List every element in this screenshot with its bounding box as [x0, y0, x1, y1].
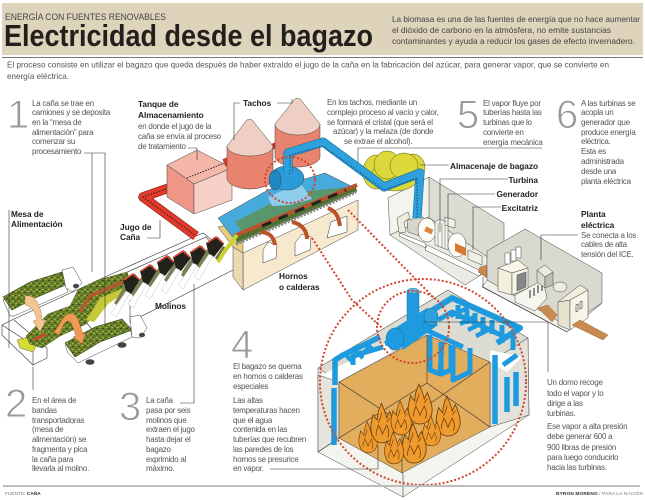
- step 2: fragmenta y pica: [32, 445, 88, 454]
- label: mesa de alimentacion: Alimentación: [11, 219, 62, 229]
- silo right: [275, 99, 320, 167]
- text: dome: debe generar 600 a: [547, 432, 613, 441]
- step 5: convierte en: [483, 128, 524, 137]
- label: planta electrica: tensión del ICE.: [581, 250, 634, 259]
- orange chamber: [339, 335, 490, 473]
- header band: [2, 3, 643, 55]
- step 2: bandas: [32, 406, 57, 415]
- furnace openings: [263, 216, 347, 263]
- step 6: A las turbinas se: [581, 99, 636, 108]
- bagasse storage: [363, 151, 425, 191]
- label: planta electrica: Planta: [581, 209, 606, 219]
- step 4: Las altas: [233, 396, 263, 405]
- step 3: 3: [119, 385, 141, 429]
- text: dome: [547, 378, 627, 472]
- step 2: alimentación) se: [32, 435, 87, 444]
- text: dome: dirige a las: [547, 399, 583, 408]
- label: tanque de almacenamiento: en donde el jugo de la: [138, 122, 212, 131]
- dome and pipe: [269, 166, 304, 190]
- step 1: 1: [7, 93, 29, 137]
- step 1: camiones y se deposita: [32, 108, 111, 117]
- header note: contaminantes y ayuda a reducir los gases de efecto invernadero.: [392, 36, 635, 46]
- header note: La biomasa es una de las fuentes de energía que no hace aumentar: [392, 14, 640, 24]
- step 3: pasa por seis: [146, 406, 191, 415]
- text: dome: hacia las turbinas.: [547, 463, 607, 472]
- machine labels: Almacenaje de bagazo: [450, 161, 538, 171]
- label: planta electrica: Se conecta a los: [581, 231, 636, 240]
- step 4: que el agua: [233, 416, 273, 425]
- title: Electricidad desde el bagazo: [4, 18, 373, 53]
- brick strips: [538, 305, 557, 322]
- intro text: energía eléctrica.: [7, 71, 69, 81]
- machine labels: [450, 161, 539, 213]
- text: dome: 900 libras de presión: [547, 443, 616, 452]
- brick strip: [478, 265, 498, 283]
- step 5: turbinas que lo: [483, 118, 533, 127]
- footer credit: BYRON MORENO / PARA LA NACIÓN: [556, 490, 644, 497]
- text: dome: para luego conducirlo: [547, 453, 619, 462]
- green plate: [235, 187, 354, 236]
- flames: [359, 384, 460, 464]
- step 2: 2: [5, 382, 27, 426]
- label: hornos: [279, 271, 320, 292]
- step 1: en la “mesa de: [32, 118, 82, 127]
- step 3: [119, 385, 196, 473]
- label: mesa de alimentacion: Mesa de: [11, 209, 44, 219]
- furnace building: [218, 200, 358, 290]
- header note: el dióxido de carbono en la atmósfera, no emite sustancias: [392, 25, 611, 35]
- step 6: Esta es: [581, 147, 606, 156]
- step 6: desde una: [581, 167, 617, 176]
- step 4: contenida en las: [233, 425, 288, 434]
- step 4: especiales: [233, 382, 269, 391]
- machine labels: Generador: [496, 189, 539, 199]
- header note: [392, 14, 640, 46]
- label: tanque de almacenamiento: Almacenamiento: [138, 110, 204, 120]
- step 6: 6: [556, 93, 578, 137]
- step 2: [5, 382, 89, 473]
- text: tachos process: complejo proceso al vacío y calor,: [327, 108, 439, 117]
- text: tachos process: En los tachos, mediante un: [327, 98, 417, 107]
- blue top plate: [218, 173, 353, 240]
- step 6: eléctrica.: [581, 137, 611, 146]
- step 6: generador que: [581, 118, 631, 127]
- step 6: acopla un: [581, 108, 613, 117]
- step 2: En el área de: [32, 396, 77, 405]
- text: dome: todo el vapor y lo: [547, 389, 604, 398]
- step 5: El vapor fluye por: [483, 99, 541, 108]
- step 4: El bagazo se quema: [233, 362, 302, 371]
- machine labels: Turbina: [509, 175, 538, 185]
- step 4: temperaturas hacen: [233, 406, 300, 415]
- white wall bands: [322, 343, 522, 382]
- label: mesa de alimentacion: [11, 209, 62, 229]
- intro text: [7, 60, 609, 81]
- step 1: procesamiento: [32, 147, 82, 156]
- label: tanque de almacenamiento: Tanque de: [138, 99, 179, 109]
- label: jugo de cana: [120, 222, 152, 242]
- step 3: molinos que: [146, 416, 187, 425]
- step 6: [556, 93, 636, 186]
- mills: [111, 237, 226, 317]
- truck right: [65, 315, 147, 365]
- step 1: alimentación” para: [32, 128, 94, 137]
- bagasse conveyor: [218, 185, 357, 262]
- red detail links: [265, 157, 436, 340]
- step 1: comenzar su: [32, 137, 75, 146]
- label: jugo de cana: Caña: [120, 232, 141, 242]
- step 6: administrada: [581, 157, 625, 166]
- yellow belt: [17, 333, 43, 352]
- control table: [515, 265, 567, 311]
- text: dome: Un domo recoge: [547, 378, 603, 387]
- step 1: [7, 93, 111, 156]
- orange arrows: [25, 296, 86, 344]
- text: tachos process: se formará el cristal (que será el: [327, 118, 433, 127]
- text: dome: Ese vapor a alta presión: [547, 422, 627, 431]
- chutes: [260, 208, 340, 245]
- step 4: en hornos o calderas: [233, 372, 303, 381]
- step 5: tuberías hasta las: [483, 108, 542, 117]
- label: molinos: Molinos: [155, 301, 186, 311]
- switchgear: [498, 247, 528, 295]
- silo left: [227, 120, 273, 189]
- label: planta electrica: eléctrica: [581, 220, 615, 230]
- juice pipe: [143, 183, 196, 236]
- text: tachos process: se extrae el alcohol).: [344, 137, 412, 146]
- turbine machine: [397, 212, 483, 276]
- step 6: produce energía: [581, 128, 636, 137]
- label: tanque de almacenamiento: [138, 99, 222, 151]
- label: tachos: Tachos: [243, 98, 272, 108]
- step 3: extraen el jugo: [146, 425, 196, 434]
- step 1: La caña se trae en: [32, 99, 94, 108]
- label: tanque de almacenamiento: caña se envía al proceso: [138, 132, 222, 141]
- step 4: tuberías que recubren: [233, 435, 306, 444]
- step 6: planta eléctrica: [581, 177, 632, 186]
- step 2: la caña para: [32, 455, 74, 464]
- turbine room: [388, 177, 504, 285]
- step 4: 4: [231, 323, 253, 367]
- step 3: bagazo: [146, 445, 172, 454]
- storage tank: [167, 150, 232, 214]
- machine labels: Excitatriz: [502, 203, 538, 213]
- label: tanque de almacenamiento: de tratamiento: [138, 142, 186, 151]
- step 3: máximo.: [146, 464, 175, 473]
- dome light panel: [268, 183, 312, 206]
- intro text: El proceso consiste en utilizar el bagazo que queda después de haber extraído el jugo de la caña en la fabricación del azúcar, para generar vapor, que se convierte en: [7, 60, 609, 70]
- step 2: (mesa de: [32, 425, 64, 434]
- cane on belt: [26, 272, 132, 348]
- step 5: energía mecánica: [483, 138, 543, 147]
- boiler: [318, 279, 529, 497]
- steam pipe: [288, 142, 420, 218]
- step 5: [457, 93, 543, 147]
- red link to silos: [224, 136, 290, 163]
- feed table and conveyor: [2, 233, 233, 365]
- cane stripes: [34, 280, 127, 340]
- label: hornos: o calderas: [279, 282, 320, 292]
- text: tachos process: azúcar) y la melaza (de donde: [333, 127, 434, 136]
- step 3: hasta dejar el: [146, 435, 191, 444]
- label: planta electrica: [581, 209, 636, 259]
- step 2: transportadoras: [32, 416, 85, 425]
- footer rule: [3, 485, 640, 487]
- label: planta electrica: cables de alta: [581, 240, 628, 249]
- text: tachos process: [327, 98, 439, 146]
- red detail circles: [320, 279, 526, 485]
- step 4: en vapor.: [233, 464, 264, 473]
- electric cabinet: [558, 285, 588, 330]
- step 3: La caña: [146, 396, 174, 405]
- label: jugo de cana: Jugo de: [120, 222, 152, 232]
- step 4: hornos se presurice: [233, 455, 299, 464]
- step 3: exprimido al: [146, 455, 187, 464]
- step 2: llevarla al molino.: [32, 464, 89, 473]
- step 4: [231, 323, 306, 473]
- electric plant room: [482, 229, 608, 340]
- truck left: [3, 267, 82, 316]
- label: hornos: Hornos: [279, 271, 308, 281]
- footer source: FUENTE: CAÑA: [5, 490, 41, 497]
- boiler tubes: [334, 298, 520, 445]
- steam drum: [385, 288, 438, 350]
- leader lines: [9, 99, 578, 469]
- step 5: 5: [457, 93, 479, 137]
- kicker: ENERGÍA CON FUENTES RENOVABLES: [5, 12, 166, 22]
- step 4: las paredes de los: [233, 445, 294, 454]
- text: dome: turbinas.: [547, 409, 575, 418]
